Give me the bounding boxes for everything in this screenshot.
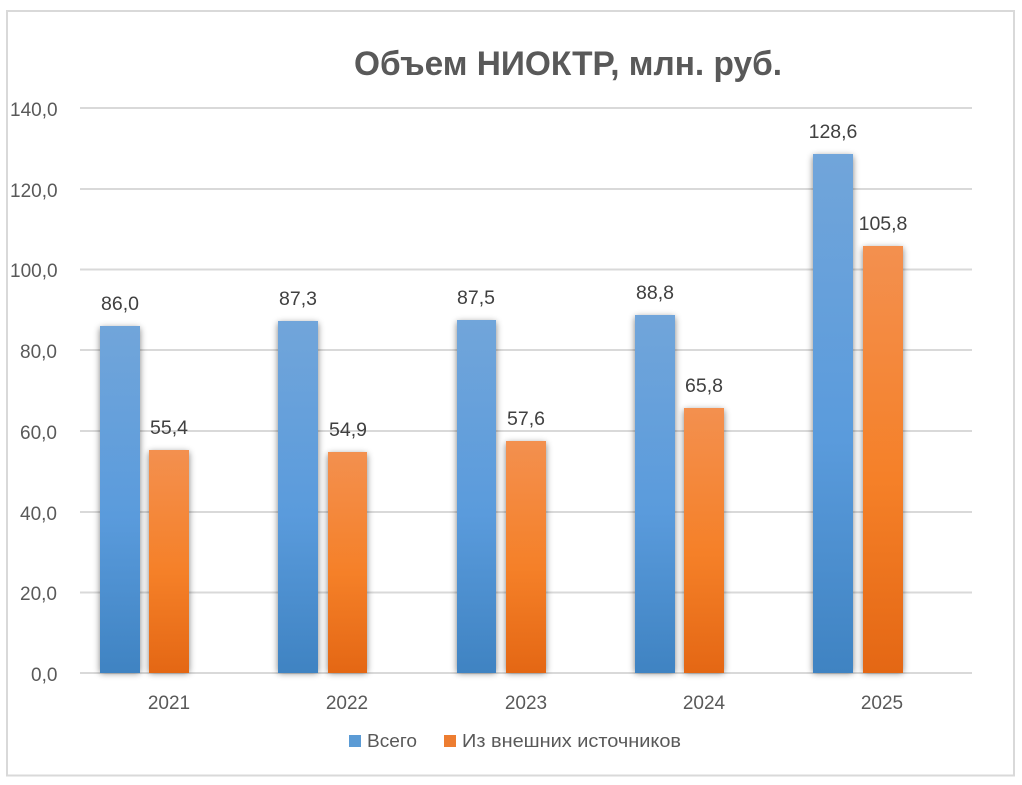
group 2025: 2025 <box>861 693 903 714</box>
group 2025: 105,8 <box>859 213 907 235</box>
legend <box>349 730 681 751</box>
y axis labels: 20,0 <box>20 584 57 605</box>
y axis labels: 40,0 <box>20 504 57 525</box>
y axis labels: 60,0 <box>20 423 57 444</box>
y axis labels: 80,0 <box>20 342 57 363</box>
y axis labels <box>10 100 58 686</box>
group 2022: 87,3 <box>279 288 317 310</box>
group 2023: 2023 <box>505 693 547 714</box>
y axis labels: 100,0 <box>10 261 58 282</box>
group 2021: 2021 <box>148 693 190 714</box>
title: Объем НИОКТР, млн. руб. <box>354 45 782 83</box>
y axis labels: 140,0 <box>10 100 58 121</box>
group 2025: 128,6 <box>809 121 857 143</box>
group 2025 <box>809 121 907 714</box>
group 2024: 65,8 <box>685 375 723 397</box>
group 2021: 55,4 <box>150 417 188 439</box>
y axis labels: 120,0 <box>10 181 58 202</box>
group 2021 <box>100 293 190 714</box>
group 2022: 2022 <box>326 693 368 714</box>
bar shadows <box>100 156 903 673</box>
legend: total: Всего <box>367 730 417 751</box>
y axis labels: 0,0 <box>31 665 57 686</box>
group 2024: 88,8 <box>636 282 674 304</box>
group 2024 <box>635 282 726 714</box>
group 2022 <box>278 288 368 714</box>
group 2021: 86,0 <box>101 293 139 315</box>
group 2023: 87,5 <box>457 287 495 309</box>
legend: external sources: Из внешних источников <box>462 730 681 751</box>
group 2023: 57,6 <box>507 408 545 430</box>
group 2023 <box>457 287 547 714</box>
group 2024: 2024 <box>683 693 726 714</box>
group 2022: 54,9 <box>329 419 367 441</box>
